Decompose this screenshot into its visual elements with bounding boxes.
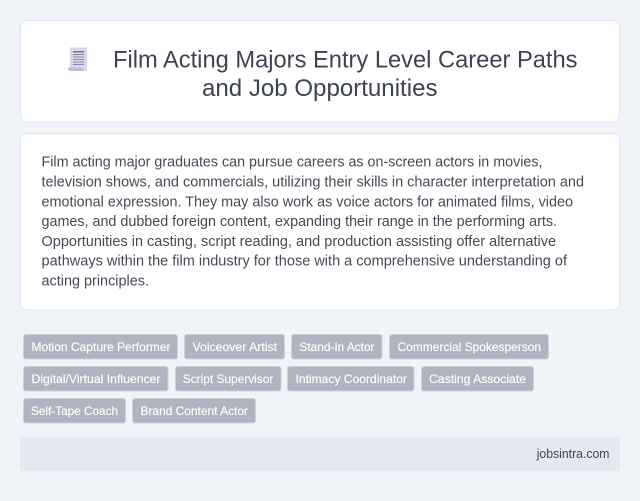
text block: description: emotional expression. They may also work as voice actors for animated films, video xyxy=(42,194,573,210)
footer bar xyxy=(20,437,620,471)
tag: Script Supervisor: Script Supervisor xyxy=(183,372,273,386)
tag: Intimacy Coordinator xyxy=(288,366,414,391)
tag: Brand Content Actor xyxy=(132,398,256,423)
panel: header xyxy=(20,20,620,122)
text block: description xyxy=(42,154,584,290)
text block: description: television shows, and commercials, utilizing their skills in character interpretation and xyxy=(42,174,584,190)
tag: Motion Capture Performer: Motion Capture Performer xyxy=(32,340,170,354)
text block: description: games, and dubbed foreign content, expanding their range in the performing arts. xyxy=(42,214,557,230)
tag: Script Supervisor xyxy=(176,366,281,391)
tag: Voiceover Artist xyxy=(184,334,284,359)
tag: Commercial Spokesperson xyxy=(390,334,548,359)
tag: Casting Associate xyxy=(422,366,534,391)
tag: Motion Capture Performer xyxy=(24,334,178,359)
text block: description: Opportunities in casting, script reading, and production assisting offer alternative xyxy=(42,234,556,250)
tag: Digital/Virtual Influencer: Digital/Virtual Influencer xyxy=(32,372,160,386)
panel: description xyxy=(20,134,620,310)
tag: Stand-In Actor xyxy=(292,334,382,359)
text block: description: pathways within the film industry for those with a comprehensive understanding of xyxy=(42,254,568,270)
title: and Job Opportunities xyxy=(202,75,438,102)
tag: Casting Associate: Casting Associate xyxy=(429,372,526,386)
tag: Stand-In Actor: Stand-In Actor xyxy=(300,340,374,354)
tag: Commercial Spokesperson: Commercial Spokesperson xyxy=(398,340,541,354)
tag: Brand Content Actor: Brand Content Actor xyxy=(140,404,248,418)
tag list xyxy=(24,334,548,423)
text block: description: acting principles. xyxy=(42,274,149,290)
icon: paper scroll xyxy=(68,48,87,71)
tag: Intimacy Coordinator: Intimacy Coordinator xyxy=(296,372,407,386)
text block: description: Film acting major graduates can pursue careers as on-screen actors in movies, xyxy=(42,154,542,170)
title: Film Acting Majors Entry Level Career Paths xyxy=(113,46,578,74)
tag: Digital/Virtual Influencer xyxy=(24,366,168,391)
tag: Self-Tape Coach xyxy=(24,398,126,423)
footer text: jobsintra.com: jobsintra.com xyxy=(536,447,610,461)
tag: Voiceover Artist: Voiceover Artist xyxy=(192,340,278,354)
title xyxy=(113,46,578,102)
tag: Self-Tape Coach: Self-Tape Coach xyxy=(31,404,118,418)
